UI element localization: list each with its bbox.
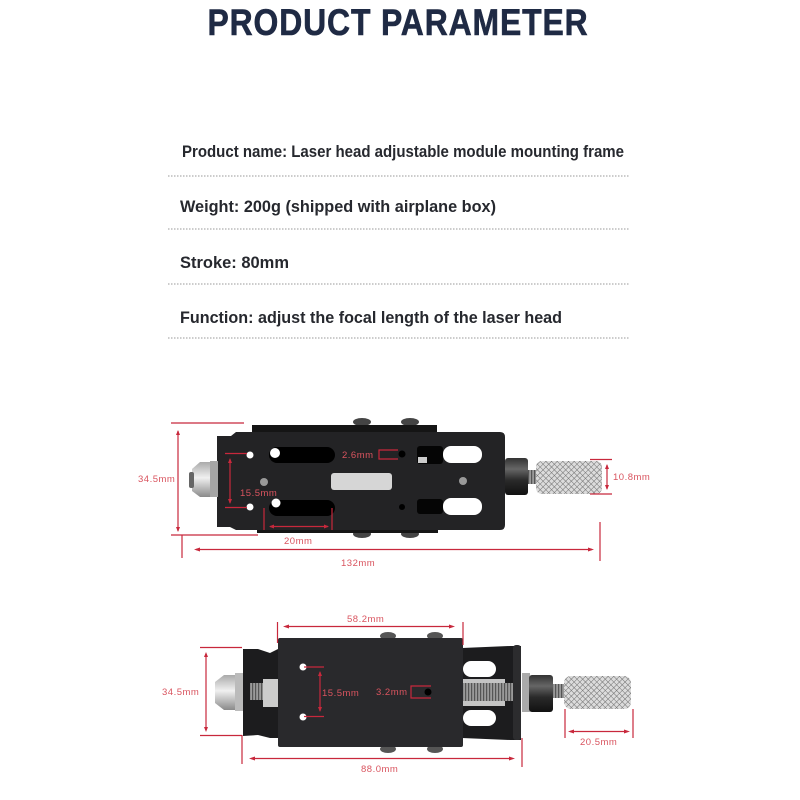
dimension 58.2mm xyxy=(278,614,463,645)
dimension 2.6mm xyxy=(342,450,398,461)
dimension 15.5mm top: 15.5mm xyxy=(240,488,277,499)
holes xyxy=(300,664,306,670)
dimension 10.8mm: 10.8mm xyxy=(613,472,650,483)
spec: stroke: Stroke: 80mm xyxy=(180,254,289,272)
dimension 34.5mm xyxy=(138,423,258,558)
rear frame right xyxy=(462,646,521,740)
nut and washer xyxy=(210,461,218,497)
collar xyxy=(522,673,530,712)
product photo: top view with slots xyxy=(189,418,602,538)
knurled knob xyxy=(564,676,631,709)
dimension 15.5mm xyxy=(304,667,359,716)
dimension 34.5mm left: 34.5mm xyxy=(162,687,199,698)
title: PRODUCT PARAMETER xyxy=(208,2,588,43)
spec: weight: Weight: 200g (shipped with airplane box) xyxy=(180,198,496,216)
nut and washer xyxy=(235,673,243,711)
spec: function: Function: adjust the focal length of the laser head xyxy=(180,309,562,327)
collar xyxy=(505,458,528,495)
dimension 88.0mm xyxy=(249,738,522,775)
dimension 20mm: 20mm xyxy=(284,536,312,547)
dimension 132mm: 132mm xyxy=(341,558,375,569)
dimension 15.5mm: 15.5mm xyxy=(322,688,359,699)
product photo: bottom view xyxy=(215,632,631,753)
dimension 132mm xyxy=(194,522,600,569)
screw heads xyxy=(380,632,396,640)
main body xyxy=(278,638,463,747)
rear frame left xyxy=(243,649,278,738)
dimension 10.8mm xyxy=(590,460,650,494)
dimension 20.5mm xyxy=(565,709,633,748)
dimension 58.2mm: 58.2mm xyxy=(347,614,384,625)
dimension 20mm xyxy=(264,508,332,547)
dimension 3.2mm: 3.2mm xyxy=(376,687,408,698)
dimensions: top view xyxy=(138,423,650,569)
main plate xyxy=(217,432,505,530)
dimension 2.6mm: 2.6mm xyxy=(342,450,374,461)
top and bottom rails xyxy=(252,425,437,433)
spec: product name: Product name: Laser head adjustable module mounting frame xyxy=(182,143,624,161)
knurled knob xyxy=(536,461,602,494)
threaded rod xyxy=(250,683,278,700)
dimensions: bottom view xyxy=(162,614,633,775)
slots xyxy=(269,447,335,463)
dimension 34.5mm: 34.5mm xyxy=(138,474,175,485)
screw heads xyxy=(353,418,371,426)
dimension 34.5mm left xyxy=(162,648,242,764)
dimension 15.5mm top xyxy=(225,454,277,508)
dimension 20.5mm: 20.5mm xyxy=(580,737,617,748)
dimension 88.0mm: 88.0mm xyxy=(361,764,398,775)
panel: product specifications xyxy=(168,143,629,338)
dimension 3.2mm xyxy=(376,686,431,698)
